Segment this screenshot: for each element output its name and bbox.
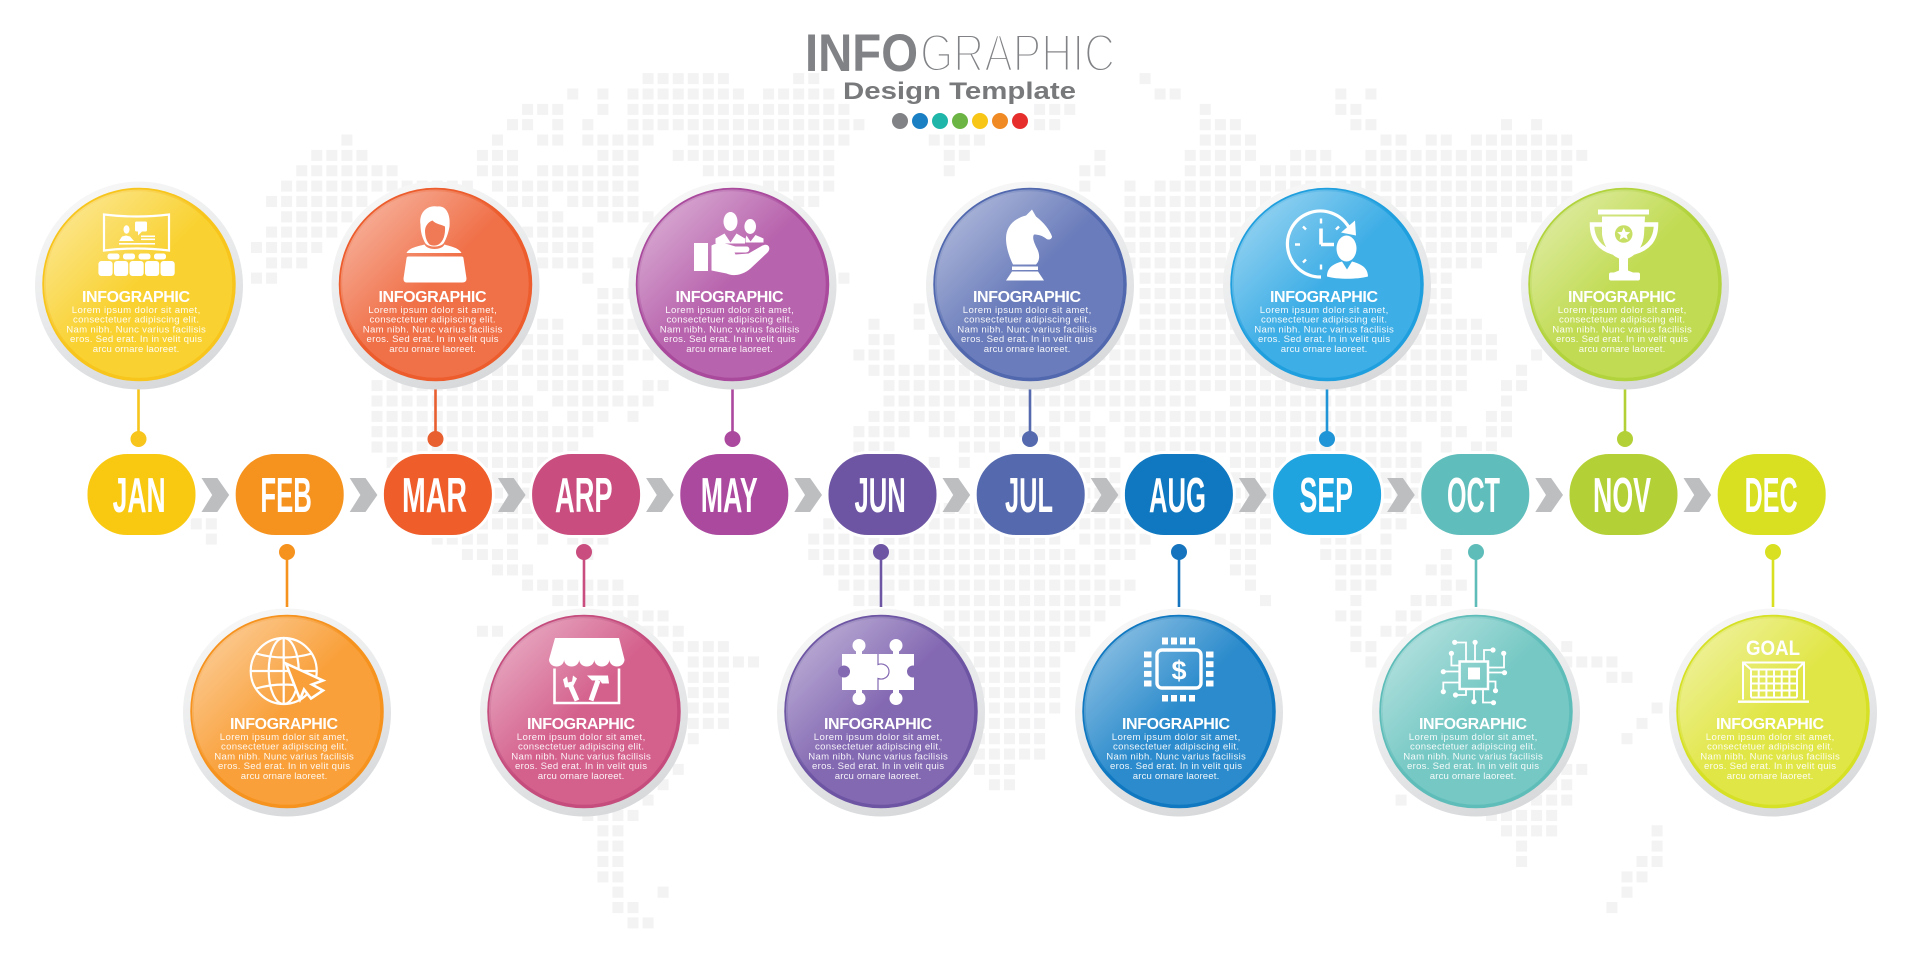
- icon: goal net: GOAL: [1746, 637, 1800, 660]
- body text: arcu ornare laoreet.: [1281, 344, 1367, 355]
- body text: Nam nibh. Nunc varius facilisis: [1106, 751, 1246, 762]
- body text: Nam nibh. Nunc varius facilisis: [511, 751, 651, 762]
- heading: INFOGRAPHIC: [1716, 716, 1824, 733]
- connector: September: [1319, 389, 1335, 447]
- body text: Nam nibh. Nunc varius facilisis: [1552, 324, 1692, 335]
- body text: eros. Sed erat. In in velit quis: [1556, 334, 1688, 345]
- icon: globe and cursor: [251, 638, 323, 704]
- icon: hand holding people: [694, 212, 769, 275]
- body text: [1106, 732, 1246, 782]
- arrow: May to Jun: [794, 478, 822, 512]
- connector: July: [1022, 389, 1038, 447]
- panel: April circle: [480, 608, 688, 816]
- body text: eros. Sed erat. In in velit quis: [70, 334, 202, 345]
- body text: Nam nibh. Nunc varius facilisis: [957, 324, 1097, 335]
- body text: arcu ornare laoreet.: [538, 771, 624, 782]
- heading: INFOGRAPHIC: [676, 289, 784, 306]
- connector: February: [279, 544, 295, 607]
- arrow: Jul to Aug: [1091, 478, 1118, 512]
- body text: consectetuer adipiscing elit.: [518, 742, 644, 753]
- heading: INFOGRAPHIC: [1419, 716, 1527, 733]
- month pill: JUL: JUL: [1005, 469, 1053, 523]
- body text: Nam nibh. Nunc varius facilisis: [1403, 751, 1543, 762]
- body text: arcu ornare laoreet.: [686, 344, 773, 355]
- heading: INFOGRAPHIC: [378, 289, 487, 306]
- panel: July circle: [926, 182, 1134, 390]
- arrow: Apr to May: [646, 478, 674, 512]
- month pill: MAY: MAY: [701, 469, 758, 523]
- body text: Lorem ipsum dolor sit amet,: [1260, 305, 1388, 316]
- month pill: ARP: [531, 452, 642, 536]
- month pill: AUG: [1123, 452, 1234, 536]
- month pill: FEB: FEB: [260, 469, 312, 523]
- panel: December circle: [1669, 608, 1877, 816]
- body text: consectetuer adipiscing elit.: [1261, 315, 1387, 326]
- title: INFOGRAPHIC: GRAPHIC: [920, 24, 1115, 83]
- body text: arcu ornare laoreet.: [1727, 771, 1813, 782]
- month pill: JUN: [827, 452, 938, 536]
- panel: May circle: [628, 182, 836, 390]
- body text: arcu ornare laoreet.: [984, 344, 1070, 355]
- panel: November circle: [1521, 182, 1729, 390]
- icon: dollar chip: $: [1171, 656, 1187, 686]
- icon: person at laptop: [404, 206, 466, 282]
- arrow: Sep to Oct: [1387, 478, 1415, 512]
- body text: Nam nibh. Nunc varius facilisis: [363, 324, 503, 335]
- body text: Lorem ipsum dolor sit amet,: [963, 305, 1091, 316]
- body text: Nam nibh. Nunc varius facilisis: [808, 751, 948, 762]
- panel: January circle: [35, 182, 243, 390]
- body text: Lorem ipsum dolor sit amet,: [1112, 732, 1240, 743]
- connector: August: [1171, 544, 1187, 607]
- body text: [1254, 305, 1394, 355]
- body text: arcu ornare laoreet.: [1133, 771, 1219, 782]
- background: dotted world map: [191, 79, 1663, 923]
- connector: April: [576, 544, 592, 607]
- connector: March: [428, 389, 444, 447]
- icon: trophy: [1592, 210, 1656, 280]
- body text: eros. Sed erat. In in velit quis: [366, 334, 499, 345]
- icon: puzzle pieces: [838, 639, 919, 705]
- body text: Lorem ipsum dolor sit amet,: [1409, 732, 1537, 743]
- arrow: Jun to Jul: [942, 478, 970, 512]
- month pill: OCT: OCT: [1447, 469, 1500, 523]
- icon: circuit chip: [1441, 640, 1507, 705]
- body text: Lorem ipsum dolor sit amet,: [220, 732, 348, 743]
- panel: March circle: [332, 182, 540, 390]
- body text: consectetuer adipiscing elit.: [221, 742, 347, 753]
- connector: October: [1468, 544, 1484, 607]
- body text: consectetuer adipiscing elit.: [1410, 742, 1536, 753]
- month pill: OCT: [1420, 452, 1531, 536]
- month pill: JAN: [86, 452, 197, 536]
- body text: consectetuer adipiscing elit.: [815, 742, 941, 753]
- body text: consectetuer adipiscing elit.: [73, 315, 199, 326]
- month pill: NOV: [1568, 452, 1679, 536]
- body text: consectetuer adipiscing elit.: [666, 315, 792, 326]
- heading: INFOGRAPHIC: [1270, 289, 1378, 306]
- body text: Lorem ipsum dolor sit amet,: [1706, 732, 1834, 743]
- month pill: MAY: [679, 452, 790, 536]
- body text: Nam nibh. Nunc varius facilisis: [1700, 751, 1840, 762]
- month pill: DEC: [1716, 452, 1827, 536]
- body text: eros. Sed erat. In in velit quis: [812, 761, 944, 772]
- body text: [957, 305, 1097, 355]
- body text: arcu ornare laoreet.: [241, 771, 327, 782]
- body text: eros. Sed erat. In in velit quis: [961, 334, 1093, 345]
- month pill: FEB: [234, 452, 345, 536]
- arrow: Aug to Sep: [1239, 478, 1267, 512]
- month pill: AUG: AUG: [1149, 469, 1206, 523]
- body text: [660, 305, 800, 355]
- arrow: Nov to Dec: [1684, 478, 1711, 512]
- heading: INFOGRAPHIC: [82, 289, 190, 306]
- arrow: Jan to Feb: [202, 478, 229, 512]
- body text: arcu ornare laoreet.: [93, 344, 179, 355]
- month pill: MAR: [382, 452, 493, 536]
- icon: dollar chip: [1144, 638, 1214, 702]
- body text: Lorem ipsum dolor sit amet,: [72, 305, 200, 316]
- panel: October circle: [1372, 608, 1580, 816]
- connector: January: [130, 389, 146, 447]
- body text: Nam nibh. Nunc varius facilisis: [214, 751, 354, 762]
- arrow: Feb to Mar: [350, 478, 377, 512]
- body text: [363, 305, 503, 355]
- title: INFOGRAPHIC: [805, 24, 1115, 83]
- icon: clock and businessman: [1287, 211, 1368, 279]
- month pill: ARP: ARP: [555, 469, 613, 523]
- body text: Lorem ipsum dolor sit amet,: [368, 305, 497, 316]
- heading: INFOGRAPHIC: [824, 716, 932, 733]
- body text: consectetuer adipiscing elit.: [1707, 742, 1833, 753]
- body text: [808, 732, 948, 782]
- connector: June: [873, 544, 889, 607]
- body text: Lorem ipsum dolor sit amet,: [1558, 305, 1686, 316]
- body text: consectetuer adipiscing elit.: [1113, 742, 1239, 753]
- connector: May: [724, 389, 740, 447]
- body text: [1700, 732, 1840, 782]
- month pill: JAN: JAN: [113, 469, 166, 523]
- month pill: JUN: JUN: [854, 469, 906, 523]
- body text: [214, 732, 354, 782]
- body text: consectetuer adipiscing elit.: [964, 315, 1090, 326]
- panel: September circle: [1223, 182, 1431, 390]
- panel: June circle: [777, 608, 985, 816]
- connector: November: [1617, 389, 1633, 447]
- title: INFOGRAPHIC: INFO: [805, 24, 918, 83]
- arrow: Oct to Nov: [1535, 478, 1563, 512]
- month pill: SEP: SEP: [1300, 469, 1353, 523]
- month pill: JUL: [975, 452, 1086, 536]
- heading: INFOGRAPHIC: [973, 289, 1081, 306]
- month pill: NOV: NOV: [1593, 469, 1651, 523]
- body text: eros. Sed erat. In in velit quis: [1110, 761, 1242, 772]
- body text: Nam nibh. Nunc varius facilisis: [660, 324, 800, 335]
- body text: Lorem ipsum dolor sit amet,: [517, 732, 645, 743]
- body text: Nam nibh. Nunc varius facilisis: [1254, 324, 1394, 335]
- icon: chess knight: [1006, 210, 1052, 280]
- icon: goal net: [1738, 637, 1809, 703]
- body text: eros. Sed erat. In in velit quis: [1407, 761, 1539, 772]
- icon: store with tools: [549, 638, 624, 703]
- panel: February circle: [183, 608, 391, 816]
- body text: eros. Sed erat. In in velit quis: [218, 761, 350, 772]
- colour dots row: [892, 113, 1028, 129]
- body text: [1403, 732, 1543, 782]
- arrow: Mar to Apr: [498, 478, 526, 512]
- body text: arcu ornare laoreet.: [1430, 771, 1516, 782]
- body text: Lorem ipsum dolor sit amet,: [665, 305, 794, 316]
- subtitle: Design Template: Design Template: [843, 78, 1076, 105]
- heading: INFOGRAPHIC: [1568, 289, 1676, 306]
- body text: eros. Sed erat. In in velit quis: [1258, 334, 1390, 345]
- heading: INFOGRAPHIC: [527, 716, 635, 733]
- body text: arcu ornare laoreet.: [1579, 344, 1665, 355]
- body text: consectetuer adipiscing elit.: [370, 315, 496, 326]
- body text: [66, 305, 206, 355]
- body text: eros. Sed erat. In in velit quis: [515, 761, 647, 772]
- heading: INFOGRAPHIC: [230, 716, 338, 733]
- body text: consectetuer adipiscing elit.: [1559, 315, 1685, 326]
- panel: August circle: [1075, 608, 1283, 816]
- heading: INFOGRAPHIC: [1122, 716, 1230, 733]
- body text: arcu ornare laoreet.: [835, 771, 921, 782]
- body text: Lorem ipsum dolor sit amet,: [814, 732, 942, 743]
- body text: [1552, 305, 1692, 355]
- icon: cinema screen and seats: [98, 214, 175, 276]
- body text: eros. Sed erat. In in velit quis: [664, 334, 796, 345]
- month pill: SEP: [1272, 452, 1383, 536]
- body text: Nam nibh. Nunc varius facilisis: [66, 324, 206, 335]
- body text: [511, 732, 651, 782]
- month pill: DEC: DEC: [1745, 469, 1798, 523]
- connector: December: [1765, 544, 1781, 607]
- body text: eros. Sed erat. In in velit quis: [1704, 761, 1836, 772]
- body text: arcu ornare laoreet.: [389, 344, 476, 355]
- month pill: MAR: MAR: [402, 469, 467, 523]
